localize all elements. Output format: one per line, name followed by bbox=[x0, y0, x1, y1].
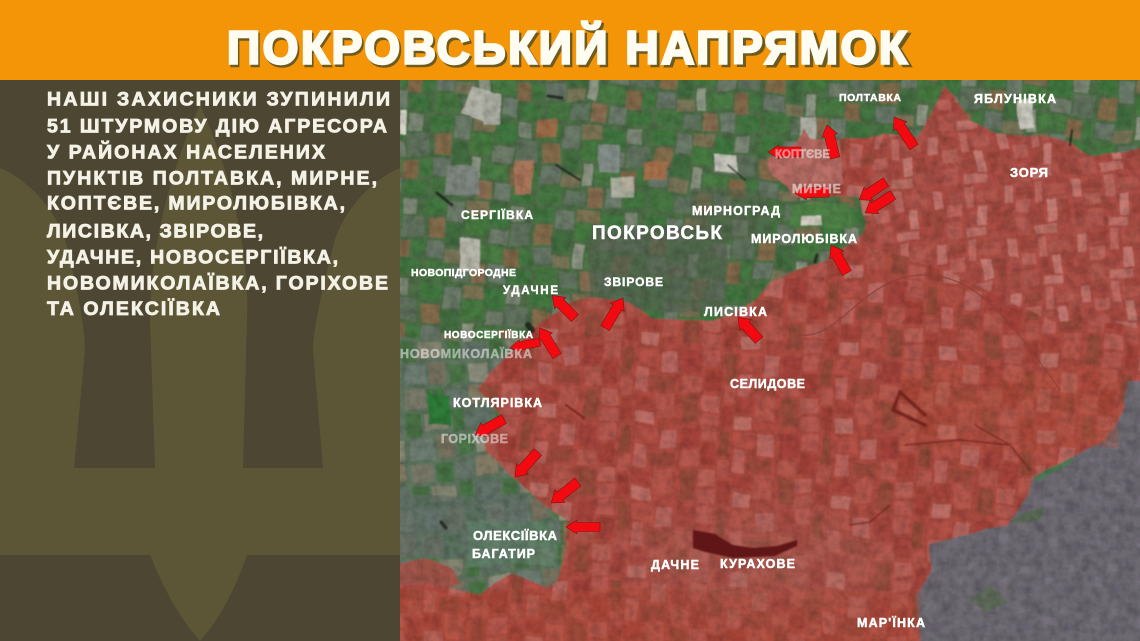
map labels: settlements: ГОРІХОВЕ bbox=[441, 432, 508, 446]
map labels: settlements: КОПТЄВЕ bbox=[775, 149, 830, 161]
map labels: settlements: МАР'ЇНКА bbox=[857, 615, 925, 630]
map labels: settlements: ЛИСІВКА bbox=[704, 305, 767, 319]
red attack arrows bbox=[471, 113, 921, 534]
map: farmland and territory layers bbox=[380, 60, 1140, 641]
map labels: settlements: НОВОМИКОЛАЇВКА bbox=[400, 346, 532, 361]
map labels: settlements: ПОЛТАВКА bbox=[839, 92, 901, 104]
text block: summary: 51 ШТУРМОВУ ДІЮ АГРЕСОРА bbox=[47, 116, 387, 138]
text block: summary bbox=[47, 88, 390, 320]
map labels: settlements: НОВОСЕРГІЇВКА bbox=[444, 328, 533, 341]
left panel: trident background bbox=[0, 80, 400, 641]
map labels: settlements: ЯБЛУНІВКА bbox=[974, 92, 1056, 106]
map labels: settlements: НОВОПІДГОРОДНЕ bbox=[411, 267, 516, 279]
title: ПОКРОВСЬКИЙ НАПРЯМОК bbox=[228, 24, 911, 76]
map labels: settlements: МИРОЛЮБІВКА bbox=[751, 232, 857, 246]
map labels: settlements: ДАЧНЕ bbox=[651, 558, 699, 572]
text block: summary: НАШІ ЗАХИСНИКИ ЗУПИНИЛИ bbox=[47, 88, 390, 110]
title: ПОКРОВСЬКИЙ НАПРЯМОК bbox=[227, 22, 908, 74]
text block: summary: УДАЧНЕ, НОВОСЕРГІЇВКА, bbox=[47, 246, 338, 268]
map labels: settlements: ПОКРОВСЬК bbox=[592, 223, 722, 244]
text block: summary: ТА ОЛЕКСІЇВКА bbox=[47, 297, 220, 320]
map labels: settlements: БАГАТИР bbox=[472, 547, 535, 561]
map labels: settlements: МИРНОГРАД bbox=[692, 204, 780, 218]
map: dark grain texture bbox=[400, 80, 1140, 641]
header bar bbox=[0, 0, 1140, 80]
map labels: settlements: УДАЧНЕ bbox=[503, 285, 558, 297]
map: gullies inside red zone bbox=[566, 392, 1030, 525]
text block: summary: НОВОМИКОЛАЇВКА, ГОРІХОВЕ bbox=[47, 272, 388, 294]
map: Kurakhove reservoir bbox=[693, 530, 797, 558]
map: dark ravines bbox=[437, 96, 1072, 528]
map labels: settlements: СЕЛИДОВЕ bbox=[730, 377, 805, 391]
map labels: settlements: ЗВІРОВЕ bbox=[604, 275, 663, 289]
map labels: settlements: СЕРГІЇВКА bbox=[461, 207, 533, 222]
map labels: settlements: КУРАХОВЕ bbox=[720, 557, 795, 571]
map labels: settlements: КОТЛЯРІВКА bbox=[453, 396, 542, 410]
map labels: settlements: МИРНЕ bbox=[792, 182, 841, 196]
map labels: settlements bbox=[400, 92, 1056, 630]
text block: summary: КОПТЄВЕ, МИРОЛЮБІВКА, bbox=[47, 192, 345, 214]
satellite map bbox=[380, 60, 1140, 641]
text block: summary: ПУНКТІВ ПОЛТАВКА, МИРНЕ, bbox=[47, 168, 377, 190]
map labels: settlements: ЗОРЯ bbox=[1010, 165, 1048, 180]
map: highway curve bbox=[800, 275, 1060, 390]
text block: summary: ЛИСІВКА, ЗВІРОВЕ, bbox=[47, 220, 263, 242]
map labels: settlements: ОЛЕКСІЇВКА bbox=[473, 528, 558, 543]
text block: summary: У РАЙОНАХ НАСЕЛЕНИХ bbox=[47, 140, 325, 164]
